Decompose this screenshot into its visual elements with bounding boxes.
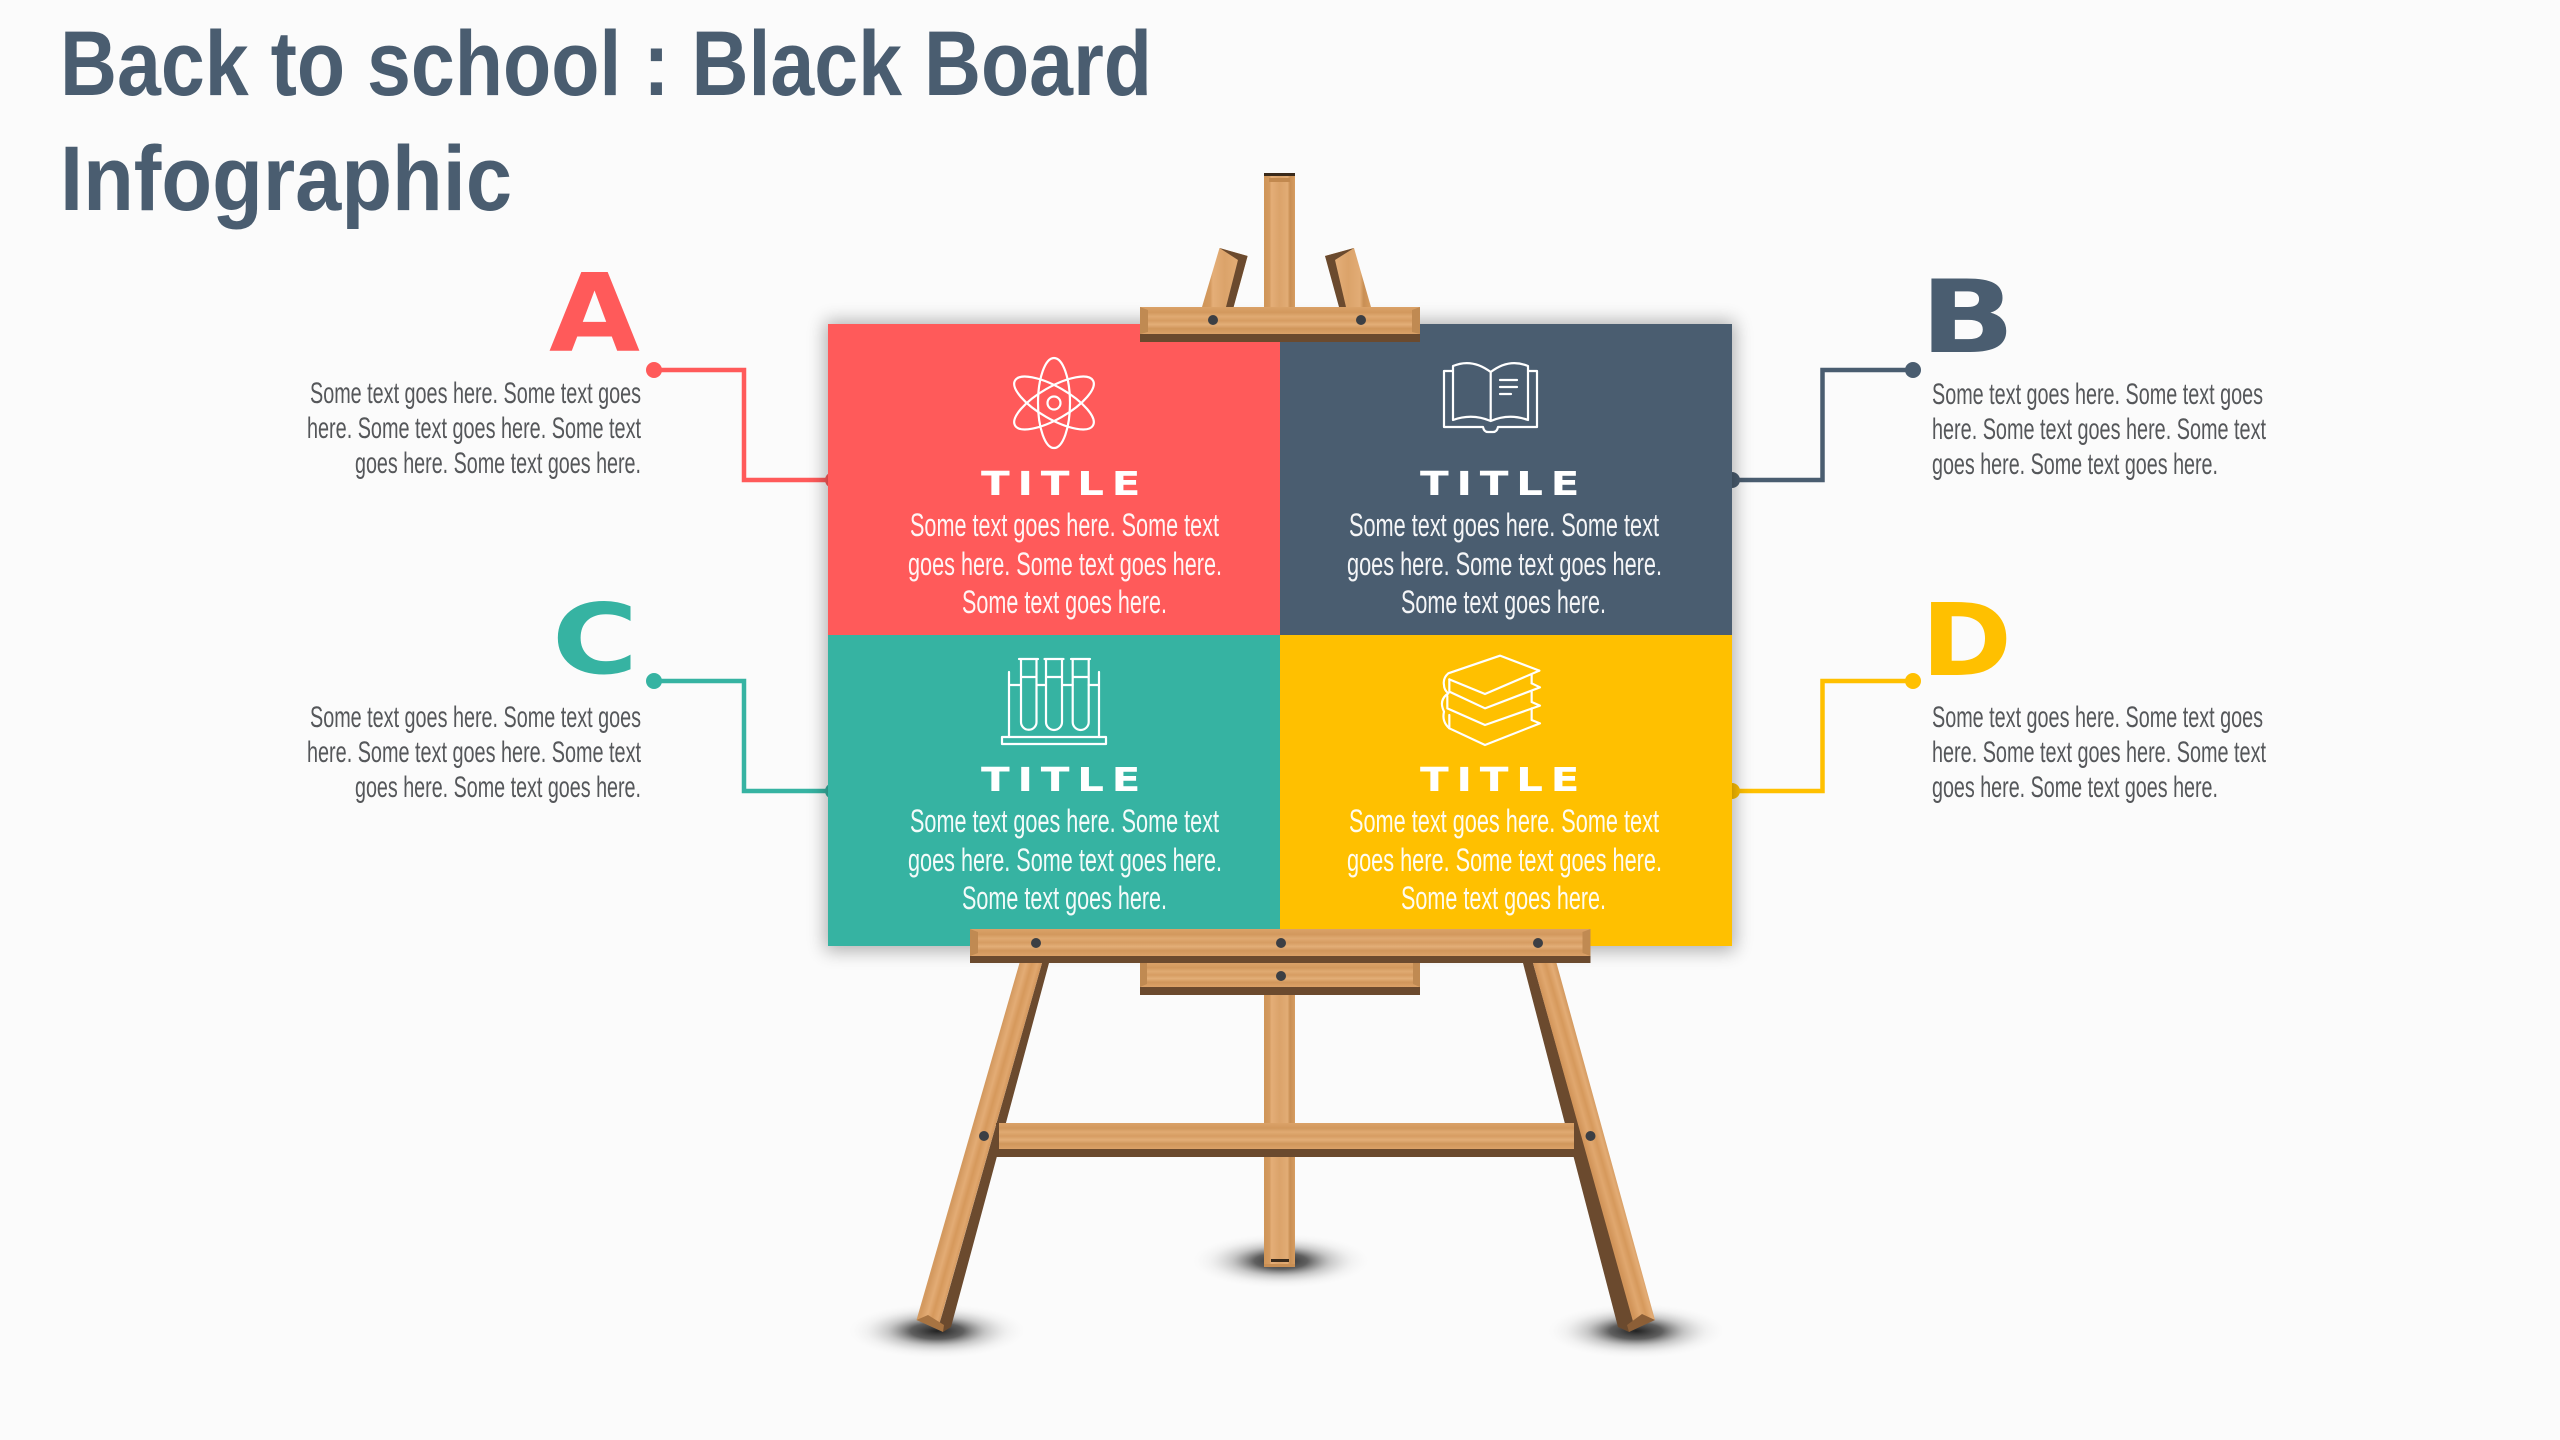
board shadow (825, 321, 1735, 951)
text A: Some text goes here. Some text goes (310, 377, 641, 410)
easel right leg (1523, 963, 1655, 1332)
red panel title: TITLE (981, 464, 1148, 503)
easel main bar (970, 929, 1590, 963)
connector B (1724, 362, 1921, 488)
navy panel title: TITLE (1420, 464, 1587, 503)
navy panel text: Some text goes here. (1401, 584, 1606, 620)
easel leg bolts (979, 1131, 1596, 1141)
floor shadows (849, 1234, 1724, 1358)
letter D: D (1921, 582, 2012, 699)
teal panel text (908, 803, 1222, 916)
title: Infographic (60, 128, 512, 230)
icon: open book (1444, 363, 1537, 432)
text B: here. Some text goes here. Some text (1932, 413, 2266, 446)
letter C: C (552, 583, 638, 696)
title (60, 13, 1152, 230)
text C: here. Some text goes here. Some text (307, 736, 641, 769)
teal panel title: TITLE (981, 760, 1148, 799)
yellow panel text (1347, 803, 1662, 916)
yellow panel title: TITLE (1420, 760, 1587, 799)
yellow panel text: goes here. Some text goes here. (1347, 842, 1662, 878)
yellow panel text: Some text goes here. (1401, 880, 1606, 916)
panel: teal (828, 635, 1280, 946)
text D: here. Some text goes here. Some text (1932, 736, 2266, 769)
upper right peg (1325, 248, 1371, 307)
icon: stack of books (1442, 656, 1540, 745)
letter A: A (549, 252, 640, 377)
text B: goes here. Some text goes here. (1932, 448, 2218, 481)
teal panel text: goes here. Some text goes here. (908, 842, 1222, 878)
text C (307, 701, 641, 804)
connector A (646, 362, 841, 488)
text D: goes here. Some text goes here. (1932, 771, 2218, 804)
panel: navy (1280, 324, 1732, 635)
label D block (1921, 582, 2266, 804)
text B (1932, 378, 2266, 481)
label B block (1920, 258, 2266, 481)
text C: goes here. Some text goes here. (355, 771, 641, 804)
red panel text (908, 507, 1222, 620)
yellow panel text: Some text goes here. Some text (1349, 803, 1659, 839)
teal panel text: Some text goes here. (962, 880, 1167, 916)
text D: Some text goes here. Some text goes (1932, 701, 2263, 734)
easel left leg (916, 963, 1049, 1332)
navy panel text (1347, 507, 1662, 620)
label C block (307, 583, 641, 804)
easel ledge bar (1140, 963, 1420, 995)
panel: yellow (1280, 635, 1732, 946)
easel crossbar (996, 1123, 1577, 1157)
text C: Some text goes here. Some text goes (310, 701, 641, 734)
text A (307, 377, 641, 480)
text A: here. Some text goes here. Some text (307, 412, 641, 445)
label A block (307, 252, 641, 480)
upper left peg (1202, 248, 1248, 307)
text D (1932, 701, 2266, 804)
text B: Some text goes here. Some text goes (1932, 378, 2263, 411)
navy panel text: Some text goes here. Some text (1349, 507, 1659, 543)
easel mast (1264, 173, 1295, 1267)
red panel text: goes here. Some text goes here. (908, 546, 1222, 582)
letter B: B (1920, 258, 2015, 376)
connector C (646, 673, 841, 799)
navy panel text: goes here. Some text goes here. (1347, 546, 1662, 582)
red panel text: Some text goes here. (962, 584, 1167, 620)
red panel text: Some text goes here. Some text (910, 507, 1219, 543)
icon: test tubes (1002, 659, 1106, 744)
text A: goes here. Some text goes here. (355, 447, 641, 480)
title: Back to school : Black Board (60, 13, 1152, 115)
teal panel text: Some text goes here. Some text (910, 803, 1219, 839)
connector D (1724, 673, 1921, 799)
icon: atom (1007, 358, 1101, 448)
easel top bracket (1140, 307, 1420, 342)
panel: red (828, 324, 1280, 635)
